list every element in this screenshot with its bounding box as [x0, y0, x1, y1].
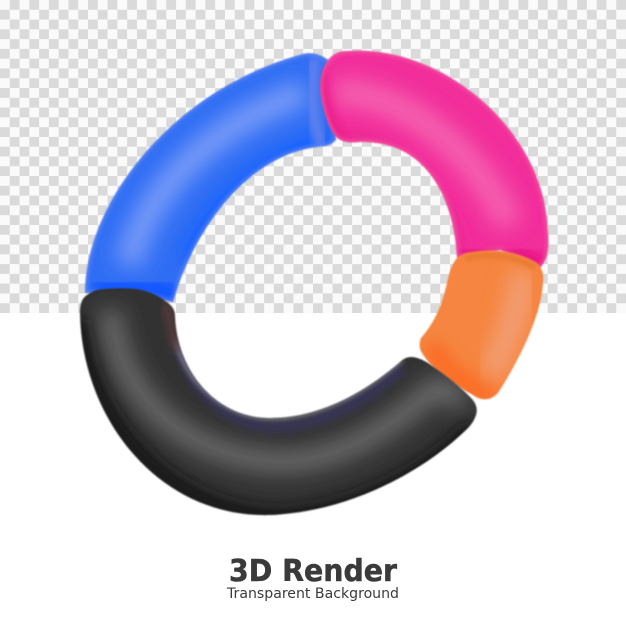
checkerboard transparency background [0, 0, 626, 313]
footer heading: 3D Render [229, 554, 397, 589]
segment: blue [84, 52, 337, 303]
donut chart: 3D ring [70, 40, 560, 520]
segment: pink [319, 50, 550, 268]
segment: black [70, 280, 490, 520]
segment: orange [418, 250, 544, 400]
footer subtitle: Transparent Background [226, 586, 399, 602]
